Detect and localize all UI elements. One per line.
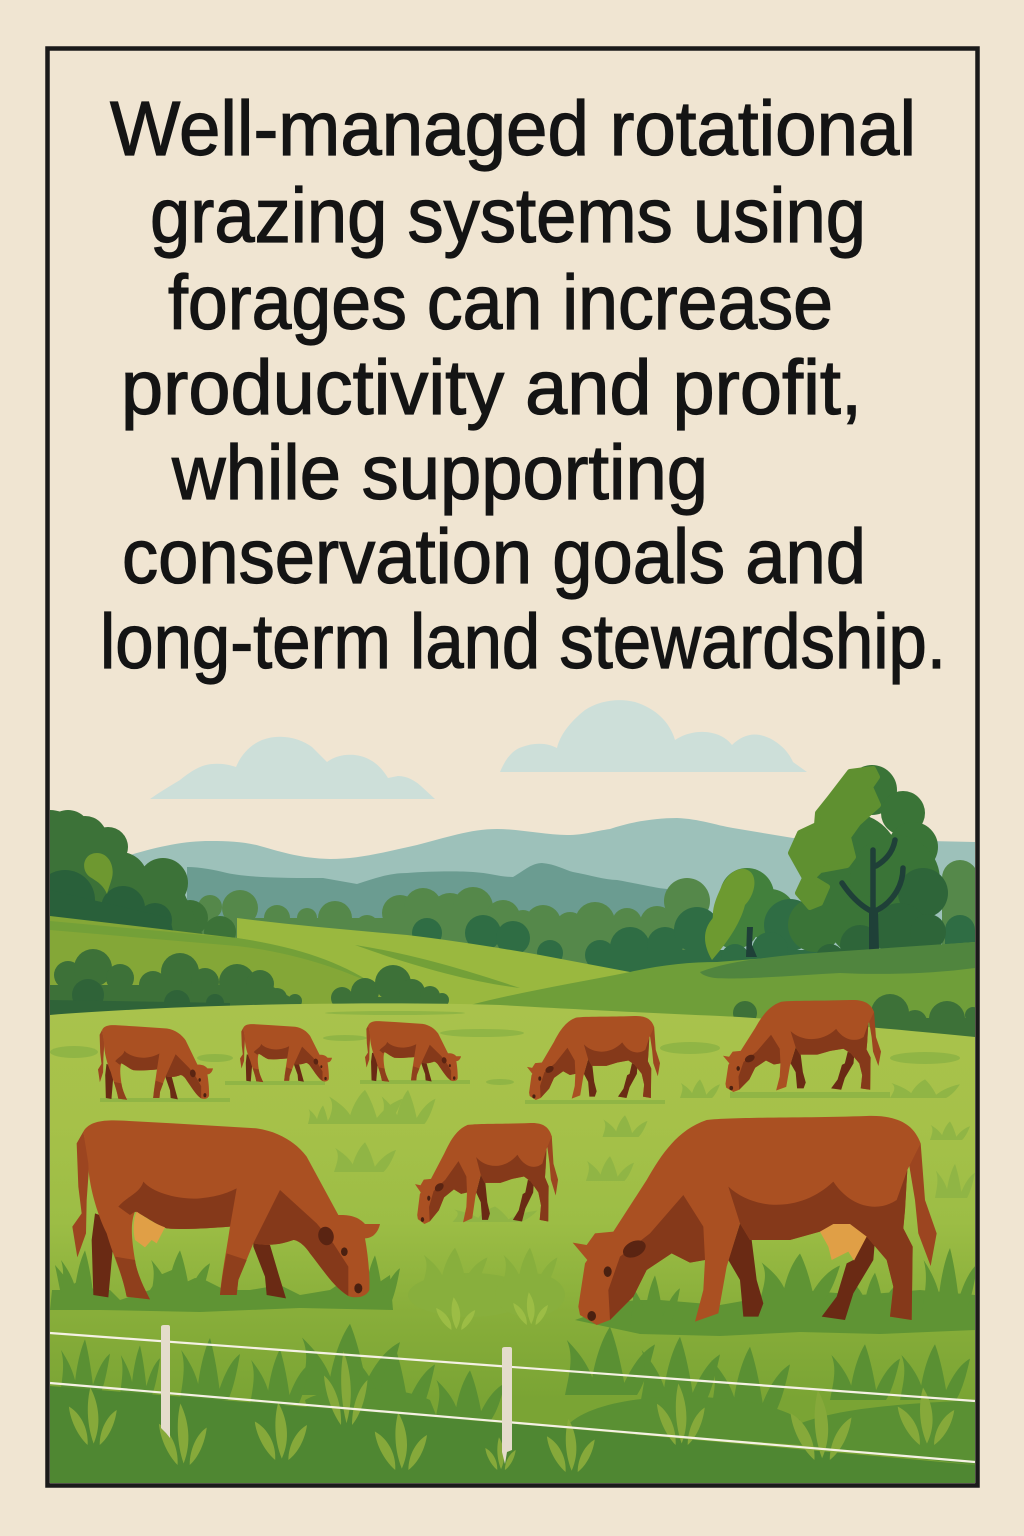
distant grass patches [50, 1011, 975, 1222]
fading grass mound centre [424, 1248, 558, 1280]
cow: far herd 5 [723, 1000, 881, 1092]
udder left cow [134, 1212, 165, 1247]
title line 3: forages can increase [168, 260, 833, 346]
hill shading [50, 921, 520, 988]
light foreground leaves [69, 1351, 954, 1472]
cow: mid calf [415, 1123, 558, 1224]
pasture illustration [20, 700, 981, 1483]
title line 6: conservation goals and [122, 514, 866, 600]
grass band under right cow [575, 1290, 975, 1336]
right hill shade [700, 942, 975, 978]
fence wire lower [50, 1383, 975, 1462]
cow: large right [573, 1116, 937, 1325]
mound leaves [436, 1292, 548, 1330]
dark foreground ground [50, 1386, 975, 1483]
cloud left [150, 737, 435, 799]
fence post 2 [502, 1347, 512, 1464]
foreground grass tufts [60, 1324, 975, 1465]
grass band under left cow [50, 1265, 393, 1312]
mid mountains [187, 863, 667, 918]
udder right cow [820, 1224, 867, 1261]
cow: far herd 2 [240, 1024, 332, 1082]
title line 2: grazing systems using [150, 173, 866, 259]
fence wire upper [50, 1333, 975, 1401]
right small tree [705, 868, 802, 960]
cow: large left [72, 1120, 380, 1299]
right hedge [733, 994, 981, 1040]
dark tree row [412, 907, 975, 972]
title line 4: productivity and profit, [121, 345, 862, 431]
far mountains [130, 818, 975, 960]
meadow [50, 1003, 975, 1483]
cow: far herd 4 [527, 1016, 660, 1100]
large oak tree [788, 765, 948, 972]
title line 5: while supporting [171, 430, 708, 516]
cow: far herd 1 [98, 1025, 213, 1100]
title line 1: Well-managed rotational [110, 86, 916, 172]
upper left hill [50, 916, 382, 1004]
cloud right [500, 700, 807, 772]
right hill [473, 942, 975, 1028]
title line 7: long-term land stewardship. [100, 599, 946, 685]
upper light hill [237, 918, 630, 1004]
title statement [100, 86, 946, 685]
left tree cluster [50, 810, 236, 938]
lower hedge left [50, 949, 449, 1006]
back tree row [198, 860, 978, 968]
lower hedge shade [50, 979, 230, 1016]
cow: far herd 3 [365, 1021, 461, 1082]
fence post 1 [161, 1325, 170, 1438]
